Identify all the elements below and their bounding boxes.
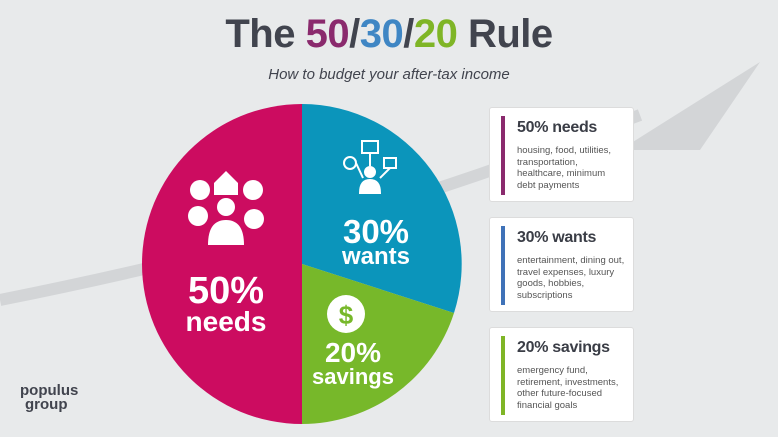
pie labels: wants [341, 243, 410, 270]
pie labels: 20% [325, 337, 381, 368]
card: wants [489, 217, 634, 312]
pie labels: 30% [343, 213, 409, 250]
icon: dollar coin [327, 295, 365, 333]
pie labels: savings [312, 364, 394, 389]
card: needs: 50% needs [517, 119, 597, 136]
pie labels: 50% [188, 270, 264, 312]
logo: populus [20, 382, 78, 399]
card: wants: entertainment, dining out, travel expenses, luxury goods, hobbies, subscriptions [517, 255, 624, 301]
logo [20, 382, 78, 413]
icon: dollar coin: $ [339, 300, 354, 330]
card: savings [489, 327, 634, 422]
pie labels: needs [186, 306, 266, 337]
card: savings: 20% savings [517, 339, 610, 356]
icon: wants person [344, 141, 396, 193]
card: needs [489, 107, 634, 202]
card: savings: emergency fund, retirement, investments, other future-focused financial goals [517, 365, 618, 411]
icon: needs person [188, 171, 264, 245]
title: The 50/30/20 Rule [225, 12, 553, 56]
card: wants: 30% wants [517, 229, 596, 246]
card: needs: housing, food, utilities, transportation, healthcare, minimum debt payments [517, 145, 611, 191]
subtitle: How to budget your after-tax income [268, 66, 510, 83]
pie labels [186, 213, 410, 389]
logo: group [25, 396, 68, 413]
